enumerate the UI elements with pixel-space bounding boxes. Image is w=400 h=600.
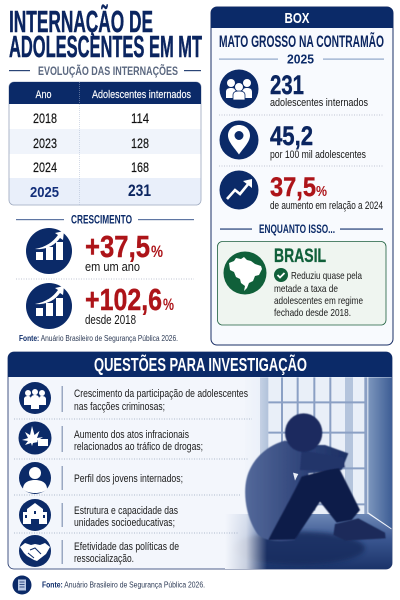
table: evolução das internações: 231 xyxy=(128,181,151,200)
Brasil text: adolescentes em regime xyxy=(274,295,363,307)
item: tráfico xyxy=(18,422,203,454)
heading: crescimento: CRESCIMENTO xyxy=(71,212,132,226)
stat: +37,5% em um ano xyxy=(26,228,163,274)
stat: 37,5% de aumento: 37,5 xyxy=(270,172,316,202)
stat: +102,6% desde 2018: +102,6 xyxy=(85,282,162,317)
item: facções xyxy=(19,382,248,414)
footer source xyxy=(12,576,205,594)
Brasil text: metade a taxa de xyxy=(274,283,338,295)
item: ressocialização: Efetividade das políticas de xyxy=(74,541,179,553)
stat: 231 adolescentes: 231 xyxy=(270,70,304,100)
item: facções: nas facções criminosas; xyxy=(74,401,165,413)
table: evolução das internações: 128 xyxy=(131,135,149,151)
icon: location pin xyxy=(220,120,258,160)
table: evolução das internações xyxy=(9,82,201,205)
table: evolução das internações: Adolescentes internados xyxy=(92,89,191,101)
stat: +102,6% desde 2018: desde 2018 xyxy=(85,313,136,327)
stat: 45,2 por 100 mil: por 100 mil adolescentes xyxy=(270,149,366,161)
item: facções: Crescimento da participação de adolescentes xyxy=(74,388,248,400)
divider: enquanto isso: ENQUANTO ISSO... xyxy=(259,224,335,236)
stat: 231 adolescentes xyxy=(220,70,368,109)
photo: adolescent seated by barred window xyxy=(225,377,392,570)
stat: 37,5% de aumento xyxy=(220,170,383,212)
footer source: Fonte: Anuário Brasileiro de Segurança Pública 2026. xyxy=(42,580,205,590)
table: evolução das internações: 168 xyxy=(131,159,149,175)
box header xyxy=(211,7,393,28)
item: tráfico: relacionados ao tráfico de drogas; xyxy=(74,441,203,453)
panel: Brasil xyxy=(218,242,386,325)
stat: 45,2 por 100 mil: 45,2 xyxy=(270,121,313,151)
table: evolução das internações: 2023 xyxy=(33,135,57,151)
panel header: QUESTÕES PARA INVESTIGAÇÃO xyxy=(94,354,307,375)
item: perfil: Perfil dos jovens internados; xyxy=(74,473,183,485)
stat: +102,6% desde 2018 xyxy=(26,282,174,329)
title: ADOLESCENTES EM MT xyxy=(9,29,202,64)
Brasil text: Reduziu quase pela xyxy=(291,270,362,282)
item: perfil xyxy=(19,462,183,494)
stat: +37,5% em um ano: +37,5 xyxy=(85,229,150,264)
item: ressocialização xyxy=(19,535,179,567)
icon: growth bars xyxy=(26,228,72,274)
icon: people xyxy=(220,70,258,108)
item: estrutura: unidades socioeducativas; xyxy=(74,517,175,529)
year divider: 2025 xyxy=(287,52,314,66)
icon: check xyxy=(274,268,288,282)
table: evolução das internações: 2018 xyxy=(33,110,57,126)
icon: building xyxy=(19,499,51,531)
stat: 231 adolescentes: adolescentes internados xyxy=(270,97,368,109)
box header: BOX xyxy=(284,10,310,27)
Brasil text xyxy=(274,270,363,319)
item: estrutura xyxy=(19,499,178,531)
item: ressocialização: ressocialização. xyxy=(74,553,134,565)
icon: group xyxy=(19,382,51,414)
table: evolução das internações: 114 xyxy=(131,110,149,126)
icon: document xyxy=(12,576,32,594)
item: tráfico: Aumento dos atos infracionais xyxy=(74,429,189,441)
icon: growth bars xyxy=(26,283,72,329)
stat: 37,5% de aumento: % xyxy=(316,183,327,200)
icon: trend arrow xyxy=(220,170,258,210)
Brasil text: fechado desde 2018. xyxy=(274,307,351,319)
panel: box Mato Grosso xyxy=(211,7,393,345)
panel: Brasil: BRASIL xyxy=(274,246,326,267)
stat: +37,5% em um ano: % xyxy=(151,242,163,261)
table: evolução das internações: Ano xyxy=(36,89,52,101)
table: evolução das internações: 2025 xyxy=(30,185,59,201)
stat: +37,5% em um ano: em um ano xyxy=(85,260,140,274)
stat: +102,6% desde 2018: % xyxy=(163,295,174,314)
icon: map of Brazil xyxy=(224,252,266,294)
stat: 45,2 por 100 mil xyxy=(220,120,366,161)
title: INTERNAÇÃO DE xyxy=(9,4,153,39)
icon: person xyxy=(19,462,51,494)
source note: Fonte: Anuário Brasileiro de Segurança Pública 2026. xyxy=(19,334,178,343)
title xyxy=(9,4,202,64)
subheading: evolução das internações: EVOLUÇÃO DAS INTERNAÇÕES xyxy=(38,63,178,78)
item: estrutura: Estrutura e capacidade das xyxy=(74,505,178,517)
panel: questões para investigação xyxy=(8,352,392,570)
table: evolução das internações: 2024 xyxy=(33,159,57,175)
panel header xyxy=(8,352,392,377)
icon: handshake xyxy=(19,535,51,567)
icon: cannabis leaf and package xyxy=(18,422,52,454)
